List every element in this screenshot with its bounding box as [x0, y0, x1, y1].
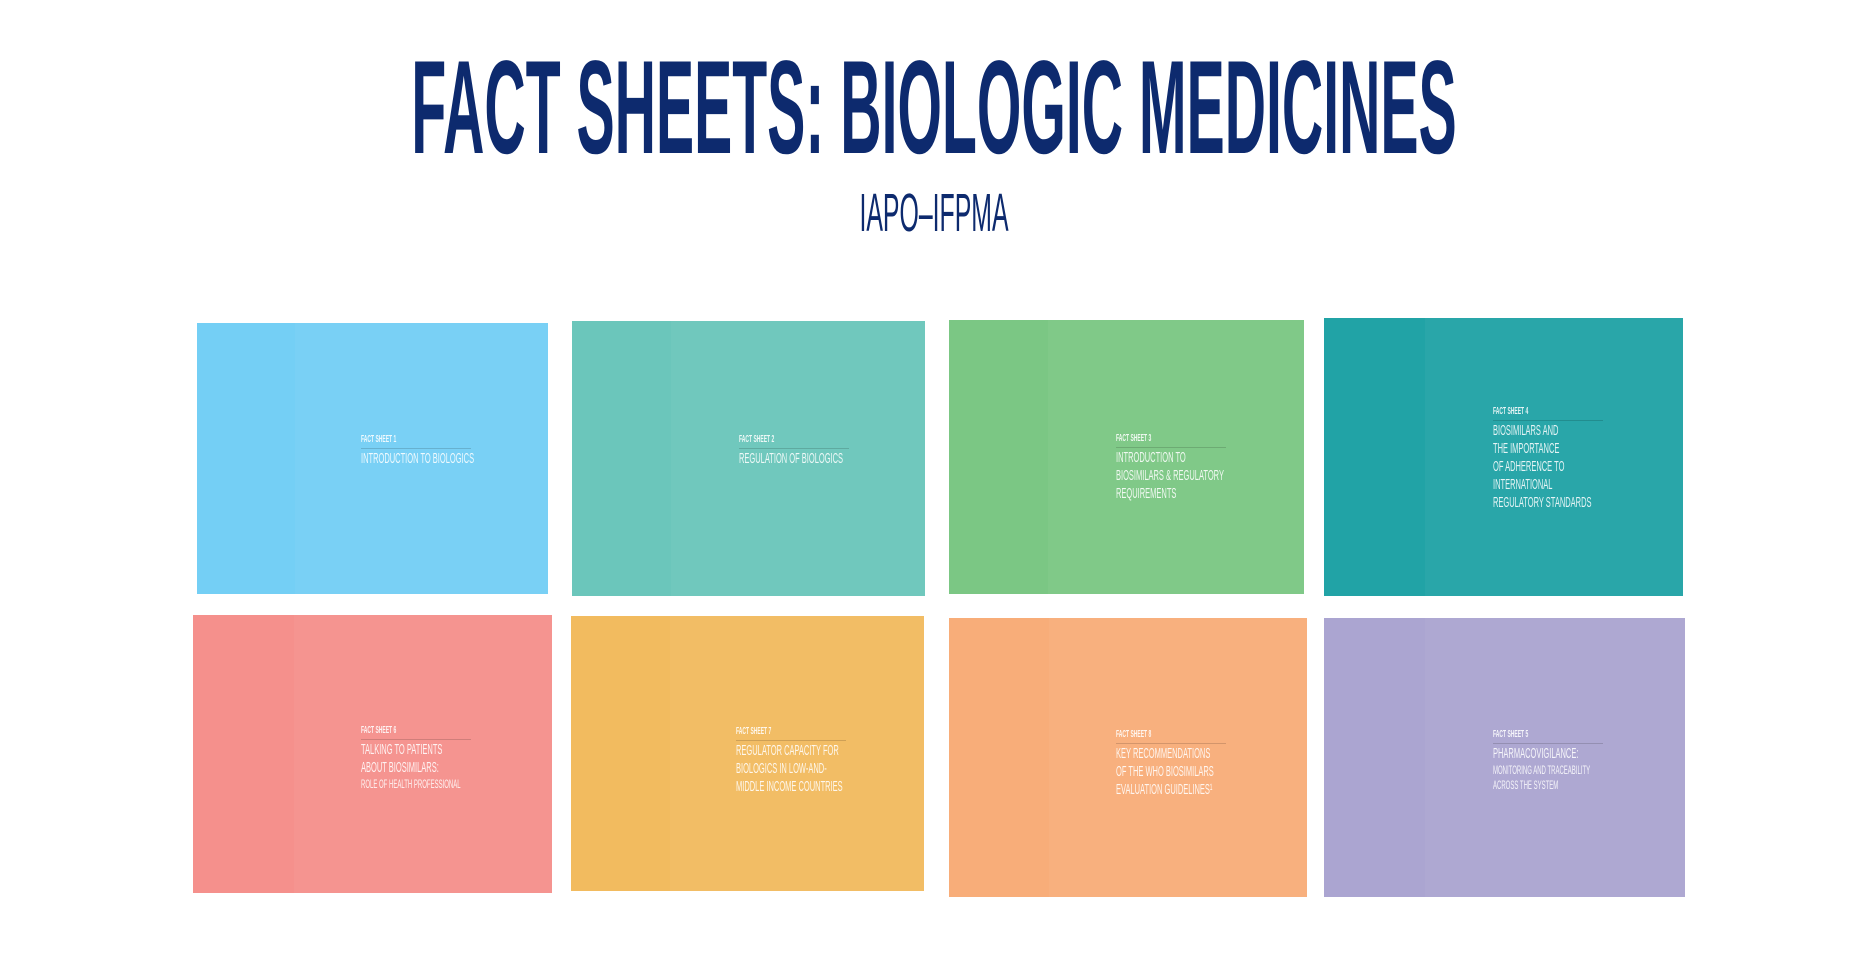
- text: fact sheet 4: INTERNATIONAL: [1493, 476, 1552, 493]
- card: fact sheet 5: [1324, 618, 1685, 897]
- text: fact sheet 7: [736, 726, 846, 795]
- text: fact sheet 3: INTRODUCTION TO: [1116, 449, 1186, 466]
- text: fact sheet 4: THE IMPORTANCE: [1493, 440, 1559, 457]
- text: fact sheet 1: INTRODUCTION TO BIOLOGICS: [361, 450, 474, 467]
- text: fact sheet 5: PHARMACOVIGILANCE:: [1493, 745, 1578, 762]
- text: fact sheet 4: [1493, 406, 1603, 511]
- text: fact sheet 3: FACT SHEET 3: [1116, 433, 1151, 444]
- card: fact sheet 2: [572, 321, 925, 596]
- text: fact sheet 2: FACT SHEET 2: [739, 434, 774, 445]
- title: FACT SHEETS: BIOLOGIC MEDICINES: [411, 34, 1456, 182]
- text: fact sheet 6: [361, 725, 471, 791]
- text: fact sheet 8: OF THE WHO BIOSIMILARS: [1116, 763, 1214, 780]
- text: fact sheet 4: FACT SHEET 4: [1493, 406, 1528, 417]
- card: fact sheet 6: [193, 615, 552, 893]
- text: fact sheet 5: [1493, 729, 1603, 792]
- text: fact sheet 7: MIDDLE INCOME COUNTRIES: [736, 778, 843, 795]
- text: fact sheet 1: [361, 434, 474, 467]
- card: fact sheet 4: [1324, 318, 1683, 596]
- text: fact sheet 3: [1116, 433, 1226, 502]
- text: fact sheet 6: FACT SHEET 6: [361, 725, 396, 736]
- card: fact sheet 3: [949, 320, 1304, 594]
- text: fact sheet 4: REGULATORY STANDARDS: [1493, 494, 1592, 511]
- text: fact sheet 6: ABOUT BIOSIMILARS:: [361, 759, 439, 776]
- text: fact sheet 7: FACT SHEET 7: [736, 726, 771, 737]
- text: fact sheet 7: REGULATOR CAPACITY FOR: [736, 742, 839, 759]
- text: fact sheet 6: TALKING TO PATIENTS: [361, 741, 442, 758]
- card: fact sheet 7: [571, 616, 924, 891]
- subtitle: IAPO–IFPMA: [859, 183, 1008, 243]
- text: fact sheet 3: REQUIREMENTS: [1116, 485, 1176, 502]
- text: fact sheet 4: BIOSIMILARS AND: [1493, 422, 1558, 439]
- card: fact sheet 1: [197, 323, 548, 594]
- text: fact sheet 2: [739, 434, 849, 467]
- text: fact sheet 8: FACT SHEET 8: [1116, 729, 1151, 740]
- text: fact sheet 5: MONITORING AND TRACEABILITY: [1493, 763, 1590, 777]
- text: fact sheet 1: FACT SHEET 1: [361, 434, 396, 445]
- text: fact sheet 8: KEY RECOMMENDATIONS: [1116, 745, 1210, 762]
- text: fact sheet 7: BIOLOGICS IN LOW-AND-: [736, 760, 827, 777]
- text: fact sheet 4: OF ADHERENCE TO: [1493, 458, 1564, 475]
- text: fact sheet 5: FACT SHEET 5: [1493, 729, 1528, 740]
- text: fact sheet 6: ROLE OF HEALTH PROFESSIONAL: [361, 777, 461, 791]
- text: fact sheet 8: [1116, 729, 1226, 798]
- text: fact sheet 8: EVALUATION GUIDELINES¹: [1116, 781, 1212, 798]
- text: fact sheet 5: ACROSS THE SYSTEM: [1493, 778, 1558, 792]
- text: fact sheet 3: BIOSIMILARS & REGULATORY: [1116, 467, 1224, 484]
- card: fact sheet 8: [949, 618, 1307, 897]
- text: fact sheet 2: REGULATION OF BIOLOGICS: [739, 450, 843, 467]
